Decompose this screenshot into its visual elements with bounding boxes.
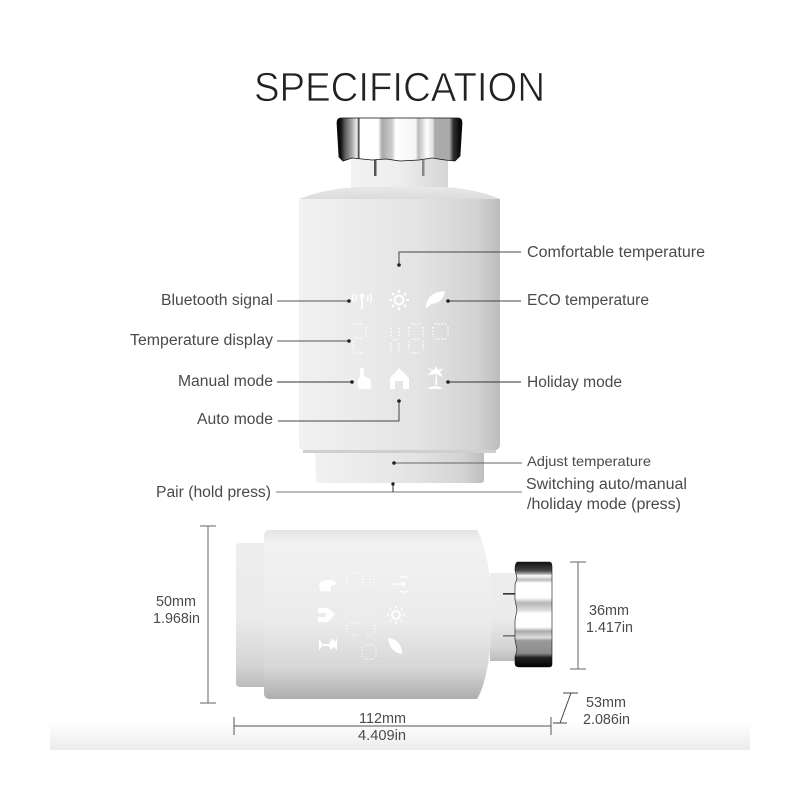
label: holiday mode: Holiday mode [527, 374, 622, 391]
icon: leaf [426, 291, 445, 308]
measure bar [553, 693, 578, 723]
floor shadow band [50, 722, 750, 750]
temperature digits [347, 573, 376, 659]
icon: leaf [388, 638, 402, 654]
callout: adjust temperature [392, 461, 522, 465]
label: pair: Pair (hold press) [156, 484, 271, 501]
icon: bluetooth signal [352, 294, 372, 309]
metal nut [337, 118, 462, 161]
value mm: 36mm [589, 603, 629, 619]
label: manual mode: Manual mode [178, 373, 273, 390]
neck notch left [374, 160, 376, 176]
collar [236, 543, 265, 687]
value in: 4.409in [358, 728, 406, 744]
label: temperature display: Temperature display [130, 332, 273, 349]
callout: bluetooth signal [277, 299, 351, 303]
value mm: 112mm [359, 711, 406, 727]
main body [299, 187, 500, 451]
label: comfortable temperature: Comfortable temperature [527, 244, 705, 261]
neck [351, 159, 448, 189]
value in: 2.086in [583, 712, 630, 728]
metal nut [515, 562, 552, 667]
ring shadow [303, 450, 496, 453]
upright thermostat [299, 118, 500, 483]
title: SPECIFICATION [254, 64, 545, 110]
label: auto mode: Auto mode [197, 411, 273, 428]
neck [490, 573, 517, 661]
icon: bluetooth signal [392, 576, 408, 592]
temperature digits [353, 324, 448, 353]
measure bar [234, 717, 551, 735]
lower adjustment ring [315, 451, 484, 483]
shoulder highlight [299, 187, 500, 199]
dimension: 36mm [570, 562, 633, 669]
icon: holiday palm island [427, 366, 443, 389]
main body [264, 530, 492, 699]
left labels [130, 292, 273, 501]
callout lines and dots [276, 252, 522, 492]
icon: auto mode house [318, 608, 335, 622]
icon: manual mode hand [319, 580, 337, 592]
label: switching mode second line: /holiday mode (press) [527, 496, 681, 513]
value in: 1.417in [586, 620, 633, 636]
callout: eco temperature [446, 299, 521, 303]
dimension: 53mm depth [553, 693, 630, 728]
label: eco temperature: ECO temperature [527, 292, 649, 309]
right labels [526, 244, 705, 513]
callout: holiday mode [446, 380, 521, 384]
value mm: 50mm [156, 594, 196, 610]
measure bar [570, 562, 586, 669]
value in: 1.968in [153, 611, 200, 627]
callout: auto mode [278, 399, 401, 421]
neck notch right [422, 160, 424, 176]
neck notch bottom [503, 635, 515, 637]
label: bluetooth signal: Bluetooth signal [161, 292, 273, 309]
neck notch top [503, 593, 515, 595]
dimension: 50mm height [153, 526, 216, 703]
callout: pair and switching [276, 482, 522, 492]
callout: comfortable temperature [397, 252, 521, 267]
icon: holiday palm [319, 638, 337, 650]
value mm: 53mm [586, 695, 626, 711]
measure bar [200, 526, 216, 703]
icon: sun [389, 290, 409, 310]
icon: auto mode house [390, 368, 409, 389]
dimension: 112mm length [234, 711, 551, 744]
label: switching mode: Switching auto/manual [526, 476, 687, 493]
horizontal thermostat [236, 530, 552, 699]
callout: temperature display [277, 339, 351, 343]
label: adjust temperature: Adjust temperature [527, 453, 651, 469]
icon: manual mode hand [357, 368, 371, 389]
callout: manual mode [277, 380, 354, 384]
icon: sun [387, 606, 405, 624]
